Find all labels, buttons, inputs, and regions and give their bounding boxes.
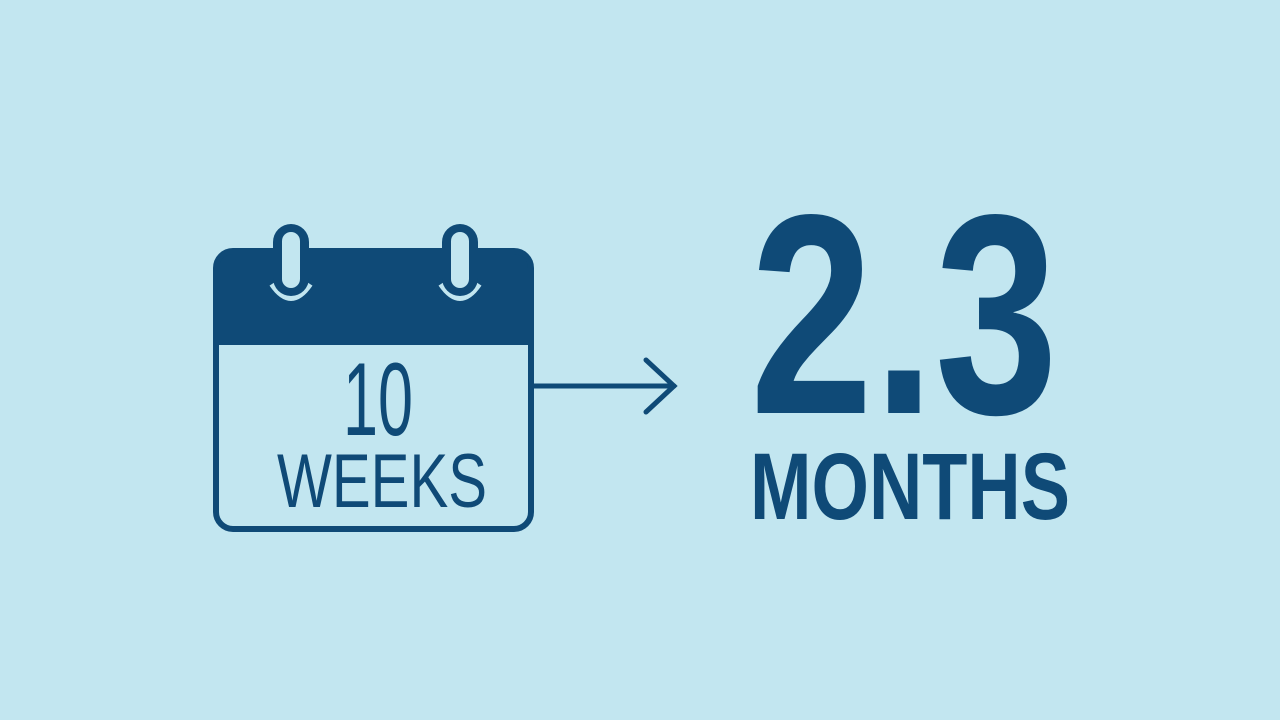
arrow	[533, 360, 674, 412]
text: 2.3: 2.3	[750, 156, 1058, 474]
ring left	[272, 224, 310, 298]
icon: calendar	[216, 224, 531, 529]
calendar header	[216, 251, 531, 345]
calendar body	[216, 251, 531, 529]
text: MONTHS: MONTHS	[750, 434, 1070, 540]
text: 10: 10	[343, 342, 413, 458]
text: WEEKS: WEEKS	[277, 439, 487, 524]
ring right	[441, 224, 479, 298]
